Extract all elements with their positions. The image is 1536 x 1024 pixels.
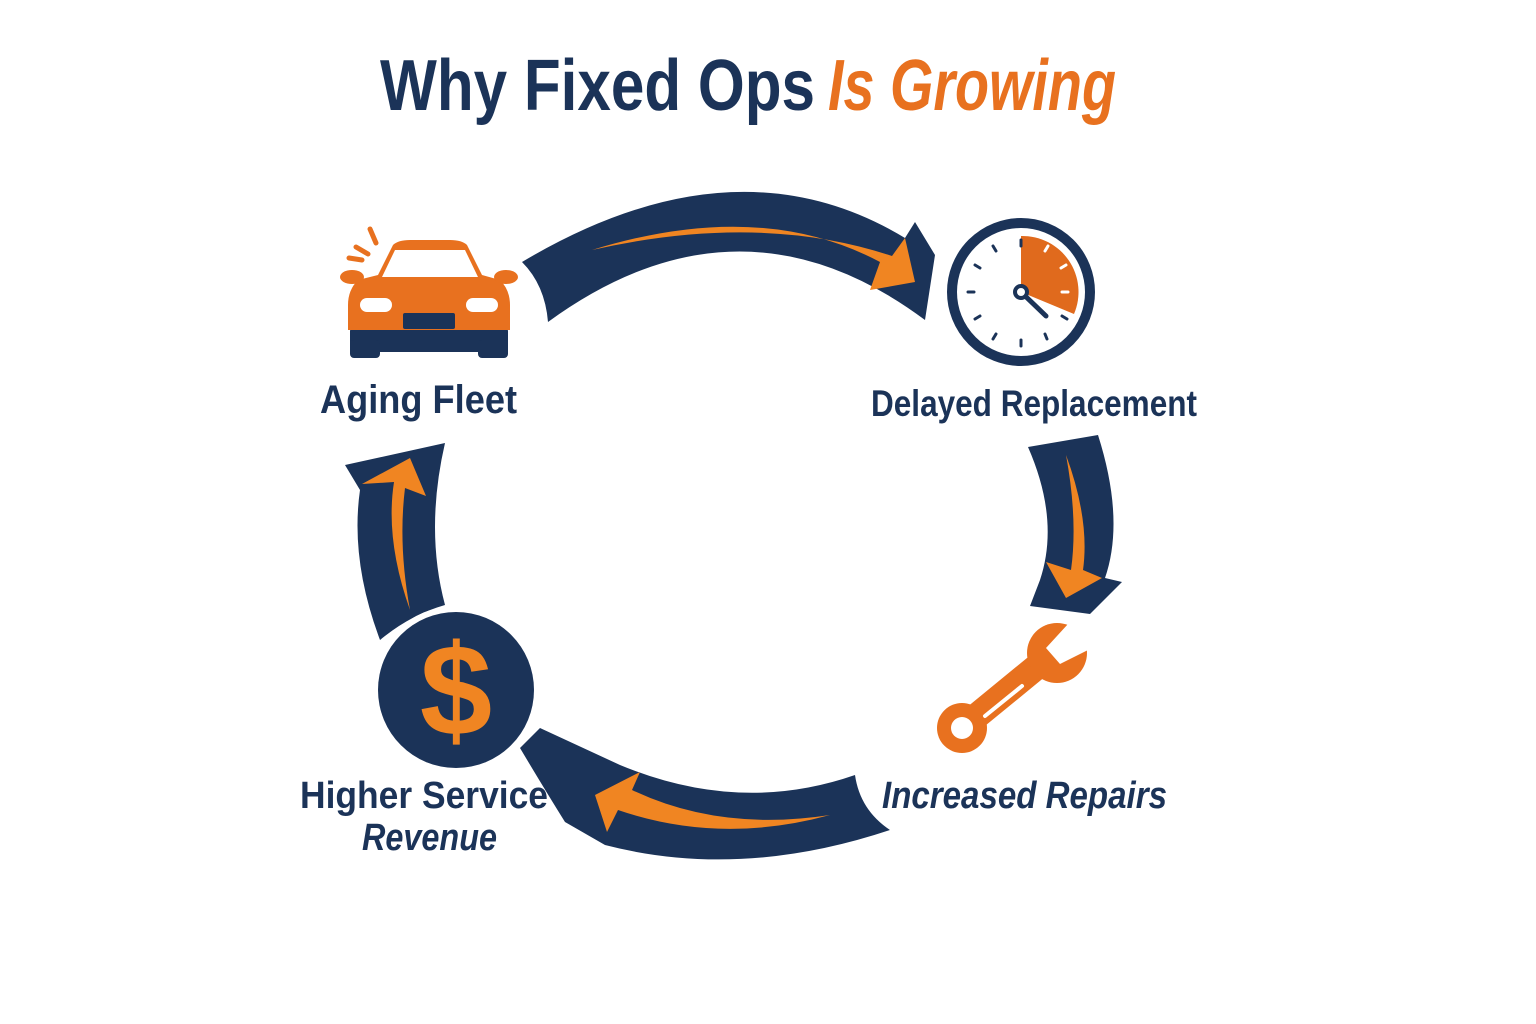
arrow: left [345,443,445,640]
arrow: top [522,192,935,322]
icon: car [340,229,518,358]
title: Is Growing [828,46,1116,126]
label: Higher Service Revenue: Higher Service [300,775,548,817]
icon: wrench [937,623,1098,753]
title: Why Fixed Ops [380,46,815,126]
icon: dollar [372,606,540,774]
label: Higher Service Revenue: Revenue [362,817,497,859]
label: Aging Fleet: Aging Fleet [320,378,517,422]
label: Higher Service Revenue [300,775,548,859]
icon: dollar: $ [420,617,492,763]
icon: clock [952,223,1090,361]
label: Increased Repairs: Increased Repairs [882,775,1167,817]
arrow: right [1028,435,1122,614]
label: Delayed Replacement: Delayed Replacement [871,383,1197,424]
arrow: bottom [520,728,890,859]
